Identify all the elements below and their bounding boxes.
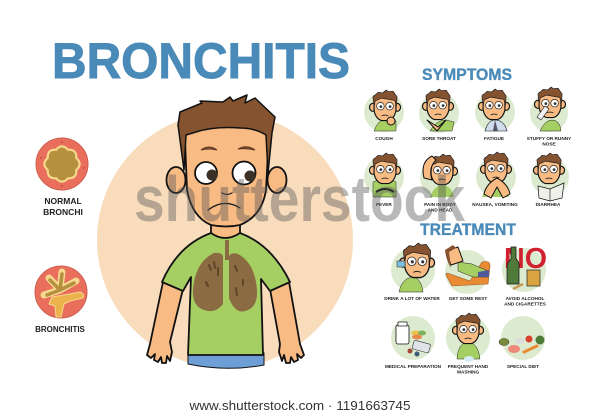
symptom: cough: COUGH [375, 136, 393, 141]
green t-shirt [162, 233, 290, 355]
treatment: frequent hand washing [446, 313, 490, 374]
symptom: diarrhea [531, 153, 569, 207]
neck [211, 222, 240, 241]
symptom: sore throat: SORE THROAT [422, 136, 456, 141]
treatment: get some rest [445, 245, 490, 301]
right arm [270, 282, 304, 363]
icon: normal bronchi [36, 138, 88, 190]
icon: bronchitis [35, 266, 87, 318]
watermark: shutterstock [134, 163, 465, 235]
eyes [195, 162, 217, 184]
treatment: frequent hand washing: WASHING [457, 370, 480, 374]
peach background circle [97, 112, 353, 368]
symptom: nausea, vomiting [472, 152, 518, 207]
treatment: avoid alcohol and cigarettes: AND CIGARETTES [504, 302, 546, 306]
main character [147, 95, 304, 368]
symptom: nausea, vomiting: NAUSEA, VOMITING [472, 202, 518, 207]
footer source line: www.shutterstock.com · 1191663745 [188, 399, 411, 413]
treatment: drink water: DRINK A LOT OF WATER [384, 296, 440, 301]
face [184, 115, 270, 226]
trousers [188, 353, 264, 368]
title: BRONCHITIS [52, 33, 350, 89]
label: bronchitis: BRONCHITIS [35, 325, 86, 334]
treatment: avoid alcohol and cigarettes [502, 243, 547, 306]
treatment: drink water [384, 243, 440, 301]
treatment: medical preparation: MEDICAL PREPARATION [385, 364, 442, 369]
symptom: stuffy or runny nose [527, 87, 572, 146]
treatment: medical preparation [385, 316, 442, 369]
symptom: fever: FEVER [376, 202, 392, 207]
treatment: get some rest: GET SOME REST [449, 296, 487, 301]
label: normal bronchi: BRONCHI [43, 207, 83, 217]
symptom: sore throat [419, 89, 459, 141]
symptom: fever [364, 153, 404, 207]
symptom: fatigue: FATIGUE [484, 136, 504, 141]
treatment: special diet [499, 316, 545, 369]
symptom: fatigue [475, 89, 515, 141]
treatment: avoid alcohol and cigarettes: AVOID ALCOHOL [506, 296, 544, 301]
symptom: pain in body and head: AND HEAD [428, 208, 453, 212]
ears [166, 167, 186, 193]
lungs [193, 240, 257, 311]
symptom: diarrhea: DIARRHEA [536, 202, 561, 207]
heading: treatment: TREATMENT [420, 221, 516, 239]
hair [178, 95, 275, 173]
symptom: cough [364, 90, 404, 141]
symptom: stuffy or runny nose: NOSE [542, 142, 556, 146]
eyebrows [201, 147, 217, 150]
treatment: avoid alcohol and cigarettes: NO [504, 243, 547, 275]
symptom: pain in body and head [420, 154, 460, 212]
label: normal bronchi: NORMAL [44, 196, 82, 206]
treatment: frequent hand washing: FREQUENT HAND [448, 364, 488, 369]
nose and mouth [208, 193, 240, 210]
heading: symptoms: SYMPTOMS [422, 66, 512, 84]
left arm [147, 282, 183, 363]
treatment: special diet: SPECIAL DIET [507, 364, 539, 369]
symptom: pain in body and head: PAIN IN BODY [424, 202, 456, 207]
symptom: stuffy or runny nose: STUFFY OR RUNNY [527, 136, 571, 141]
